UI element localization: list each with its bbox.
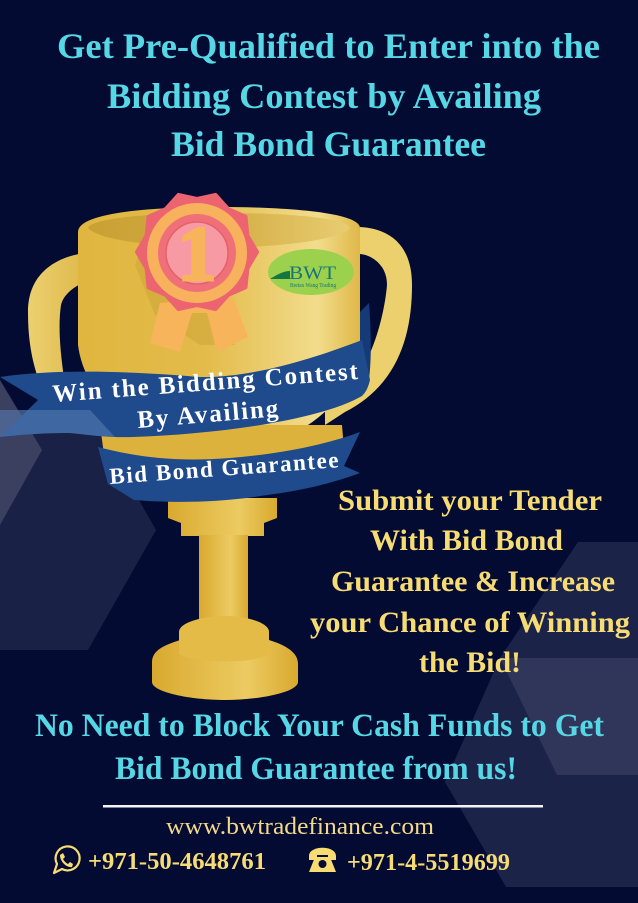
icon: whatsapp bbox=[54, 846, 80, 873]
callout text: your Chance of Winning bbox=[310, 606, 630, 639]
lower ribbon: Bid Bond Guarantee bbox=[109, 447, 341, 489]
base tier bbox=[179, 616, 269, 662]
title bbox=[57, 26, 600, 164]
base bbox=[152, 640, 298, 700]
title: Bidding Contest by Availing bbox=[107, 76, 541, 116]
upper ribbon: Win the Bidding Contest bbox=[51, 358, 361, 408]
BWT logo: Bretax Wang Trading bbox=[290, 283, 336, 289]
rosette bbox=[137, 195, 257, 309]
lower ribbon bbox=[98, 432, 360, 502]
subheading: No Need to Block Your Cash Funds to Get bbox=[35, 708, 604, 744]
cup lower bowl bbox=[100, 425, 345, 462]
cup body bbox=[78, 207, 360, 452]
phone number whatsapp: +971-50-4648761 bbox=[88, 849, 266, 875]
ribbon overlay hexagon tint bbox=[0, 410, 115, 437]
callout text bbox=[310, 484, 630, 679]
rosette badge bbox=[135, 195, 257, 352]
rosette center bbox=[158, 214, 236, 292]
callout text: Submit your Tender bbox=[338, 484, 602, 517]
callout text: With Bid Bond bbox=[370, 524, 563, 557]
number one: 1 bbox=[178, 210, 216, 297]
callout text: Guarantee & Increase bbox=[331, 565, 615, 598]
callout text: the Bid! bbox=[419, 646, 521, 679]
rosette ring bbox=[147, 203, 247, 303]
cup inner rim bbox=[88, 213, 350, 248]
stem collar bbox=[168, 498, 277, 536]
title: Bid Bond Guarantee bbox=[171, 124, 486, 164]
background hexagons bbox=[0, 380, 638, 887]
upper ribbon bbox=[0, 303, 371, 437]
trophy bbox=[28, 207, 412, 700]
left handle bbox=[28, 252, 95, 378]
upper ribbon: By Availing bbox=[136, 395, 281, 434]
subheading bbox=[35, 708, 604, 787]
BWT logo: BWT bbox=[289, 263, 336, 284]
right handle bbox=[325, 227, 412, 425]
ribbon tails bbox=[150, 297, 248, 352]
rosette shadow bbox=[135, 225, 235, 345]
icon: telephone bbox=[309, 848, 336, 872]
stem bbox=[199, 535, 248, 625]
phone number landline: +971-4-5519699 bbox=[347, 850, 510, 876]
website: www.bwtradefinance.com bbox=[166, 814, 434, 840]
BWT logo bbox=[268, 249, 354, 295]
title: Get Pre-Qualified to Enter into the bbox=[57, 26, 600, 66]
subheading: Bid Bond Guarantee from us! bbox=[115, 751, 517, 787]
